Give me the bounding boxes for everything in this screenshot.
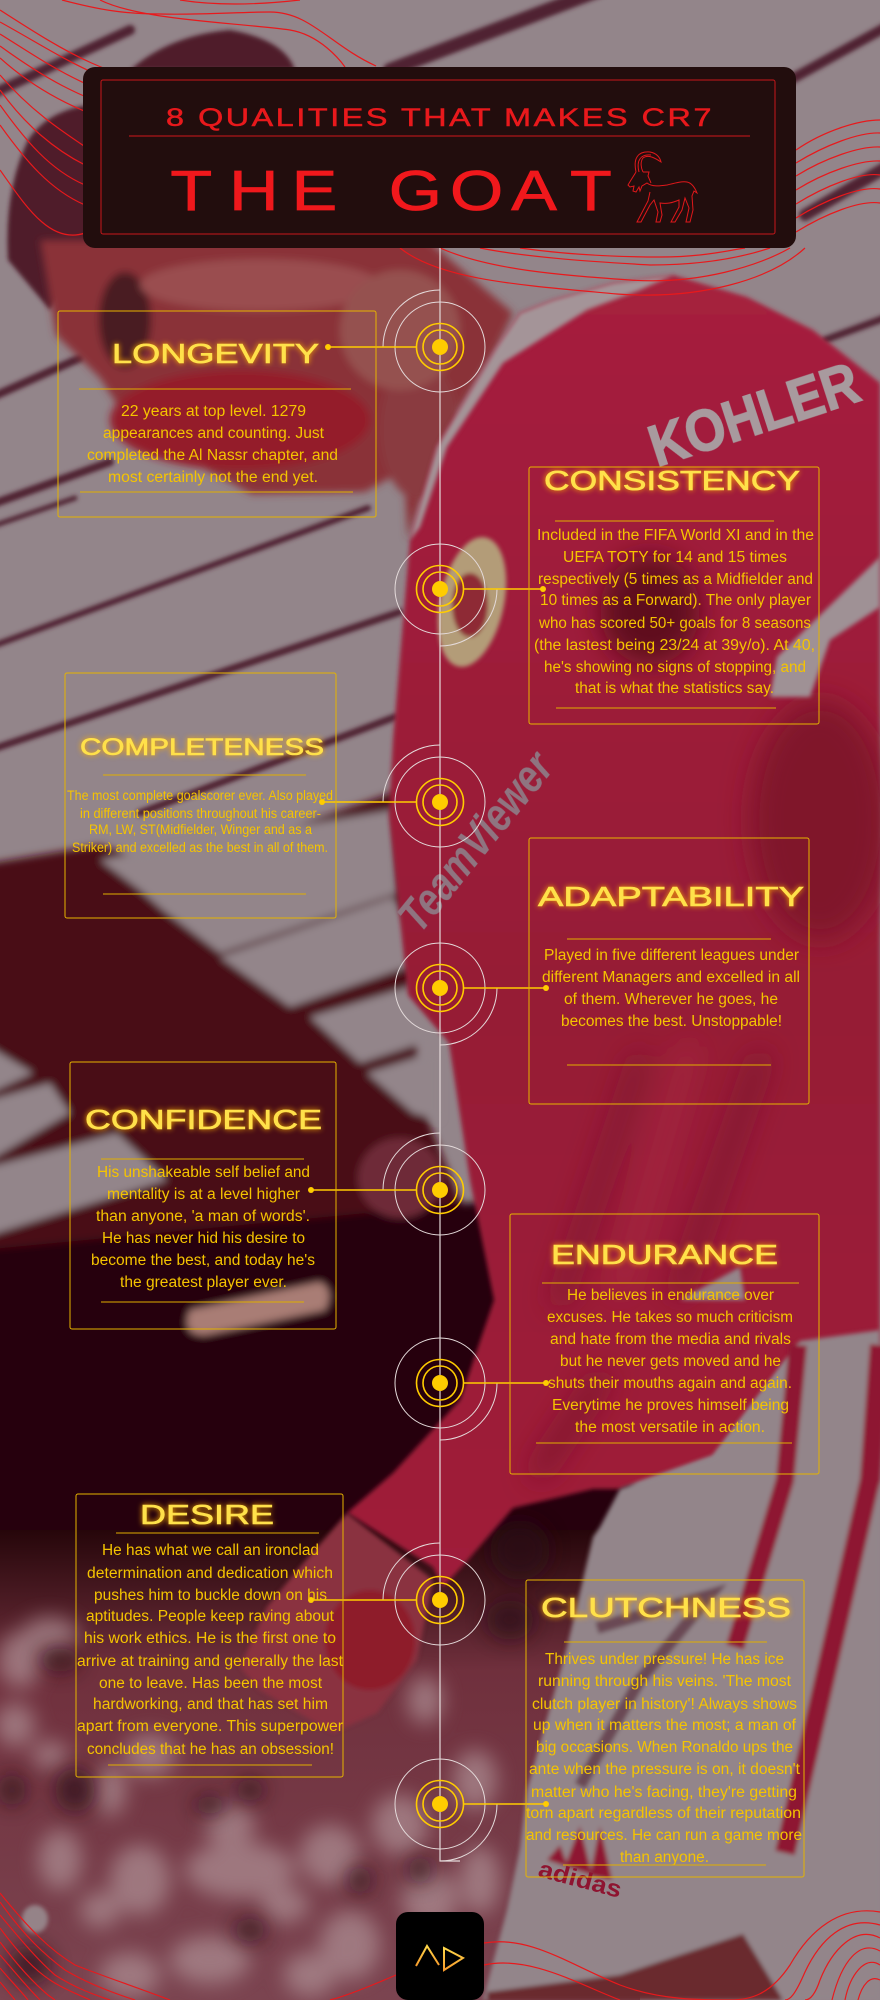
text block: pushes him to buckle down on his bbox=[94, 1587, 327, 1604]
main title: THEGOAT bbox=[170, 159, 612, 223]
text block bbox=[547, 1287, 793, 1436]
text block: his work ethics. He is the first one to bbox=[84, 1630, 336, 1647]
crowd bbox=[0, 1530, 640, 2000]
heading: ADAPTABILITY bbox=[538, 881, 804, 912]
text block: mentality is at a level higher bbox=[107, 1186, 300, 1203]
text block: and resources. He can run a game more bbox=[526, 1827, 802, 1844]
lower left dark area bbox=[0, 788, 636, 1530]
text block bbox=[67, 788, 333, 855]
text block: that is what the statistics say. bbox=[575, 680, 774, 697]
text block: 10 times as a Forward). The only player bbox=[540, 592, 811, 609]
heading: CLUTCHNESS bbox=[541, 1592, 791, 1623]
text block: one to leave. Has been the most bbox=[99, 1675, 323, 1692]
text block bbox=[534, 527, 815, 697]
heading: LONGEVITY bbox=[112, 338, 319, 369]
heading: CONFIDENCE bbox=[85, 1104, 322, 1135]
text block: becomes the best. Unstoppable! bbox=[561, 1013, 782, 1030]
jersey bbox=[347, 275, 880, 1587]
text block: different Managers and excelled in all bbox=[542, 969, 800, 986]
text block: Everytime he proves himself being bbox=[552, 1397, 789, 1414]
heading: COMPLETENESS bbox=[80, 734, 324, 761]
sleeve mesh band bbox=[770, 557, 880, 697]
text block: running through his veins. 'The most bbox=[538, 1673, 792, 1690]
node 1 bbox=[325, 290, 485, 392]
text block: Thrives under pressure! He has ice bbox=[545, 1651, 784, 1668]
heading: CONSISTENCY bbox=[544, 465, 800, 496]
node 3 bbox=[319, 745, 485, 847]
text block: and hate from the media and rivals bbox=[550, 1331, 791, 1348]
heading: DESIRE bbox=[140, 1499, 274, 1530]
text block: clutch player in history'! Always shows bbox=[532, 1696, 797, 1713]
crowd blotches bbox=[0, 1617, 500, 1997]
text block: than anyone, 'a man of words'. bbox=[96, 1208, 310, 1225]
text block: Striker) and excelled as the best in all of them. bbox=[72, 840, 328, 855]
panel: desire bbox=[76, 1494, 344, 1777]
text block: respectively (5 times as a Midfielder and bbox=[538, 571, 813, 588]
text block: big occasions. When Ronaldo ups the bbox=[536, 1739, 793, 1756]
text block: torn apart regardless of their reputation bbox=[526, 1805, 801, 1822]
text block: concludes that he has an obsession! bbox=[87, 1741, 334, 1758]
text block: Played in five different leagues under bbox=[544, 947, 799, 964]
node 2 bbox=[395, 544, 546, 646]
patch under sleeve bbox=[680, 1267, 745, 1300]
text block: UEFA TOTY for 14 and 15 times bbox=[563, 549, 787, 566]
text block: apart from everyone. This superpower bbox=[77, 1718, 343, 1735]
trefoil bars bbox=[547, 1826, 612, 1880]
text block bbox=[87, 403, 338, 486]
text block: The most complete goalscorer ever. Also played bbox=[67, 788, 333, 803]
text block: completed the Al Nassr chapter, and bbox=[87, 447, 338, 464]
panel: adaptability bbox=[529, 838, 809, 1104]
logo badge bbox=[396, 1912, 484, 2000]
text block: He has never hid his desire to bbox=[102, 1230, 305, 1247]
text block: RM, LW, ST(Midfielder, Winger and as a bbox=[89, 822, 312, 837]
node 5 bbox=[308, 1133, 485, 1235]
text block: the greatest player ever. bbox=[120, 1274, 287, 1291]
text block: up when it matters the most; a man of bbox=[533, 1717, 797, 1734]
text block: arrive at training and generally the last bbox=[77, 1653, 344, 1670]
text block: excuses. He takes so much criticism bbox=[547, 1309, 793, 1326]
hair bbox=[7, 30, 295, 310]
hand bbox=[240, 1513, 433, 1733]
text block: (the lastest being 23/24 at 39y/o). At 40, bbox=[534, 637, 815, 654]
wall stripes bbox=[0, 0, 880, 813]
text block: 22 years at top level. 1279 bbox=[121, 403, 306, 420]
collar trim bbox=[410, 275, 673, 540]
text block: He has what we call an ironclad bbox=[102, 1542, 319, 1559]
panel: confidence bbox=[70, 1062, 336, 1329]
text block: determination and dedication which bbox=[87, 1565, 333, 1582]
text block: His unshakeable self belief and bbox=[97, 1164, 310, 1181]
text block: become the best, and today he's bbox=[91, 1252, 315, 1269]
node 6 bbox=[395, 1338, 549, 1440]
text block: most certainly not the end yet. bbox=[108, 469, 318, 486]
text block: in different positions throughout his career- bbox=[80, 806, 321, 821]
text block: He believes in endurance over bbox=[567, 1287, 774, 1304]
text block: who has scored 50+ goals for 8 seasons bbox=[538, 615, 811, 632]
node 7 bbox=[308, 1543, 485, 1645]
panel: completeness bbox=[65, 673, 336, 918]
node 8 bbox=[395, 1759, 549, 1861]
background photo: TeamViewer bbox=[387, 740, 564, 941]
crest bbox=[434, 534, 510, 670]
icon: goat bbox=[628, 152, 697, 222]
text block: but he never gets moved and he bbox=[560, 1353, 781, 1370]
face and neck bbox=[40, 240, 513, 540]
text block bbox=[542, 947, 800, 1030]
text block: the most versatile in action. bbox=[575, 1419, 765, 1436]
text block: Included in the FIFA World XI and in the bbox=[537, 527, 814, 544]
shirt number bbox=[580, 1595, 710, 1786]
text block bbox=[91, 1164, 315, 1291]
subtitle: 8 QUALITIES THAT MAKES CR7 bbox=[166, 104, 714, 132]
text block: than anyone. bbox=[620, 1849, 709, 1866]
text block: appearances and counting. Just bbox=[103, 425, 325, 442]
text block bbox=[77, 1542, 344, 1758]
heading: ENDURANCE bbox=[551, 1239, 778, 1270]
text block: shuts their mouths again and again. bbox=[548, 1375, 792, 1392]
text block: hardworking, and that has set him bbox=[93, 1696, 328, 1713]
text block: he's showing no signs of stopping, and bbox=[544, 659, 806, 676]
timeline vertical line bbox=[440, 248, 460, 1861]
panel: consistency bbox=[529, 465, 819, 724]
panel: longevity bbox=[58, 311, 376, 517]
shorts bbox=[483, 1330, 880, 2000]
node 4 bbox=[395, 943, 549, 1045]
text block: of them. Wherever he goes, he bbox=[564, 991, 778, 1008]
text block: matter who he's facing, they're getting bbox=[531, 1784, 797, 1801]
text block: aptitudes. People keep raving about bbox=[86, 1608, 335, 1625]
title banner bbox=[83, 67, 796, 248]
panel: endurance bbox=[510, 1214, 819, 1474]
text block bbox=[526, 1651, 802, 1866]
background photo: adidas bbox=[535, 1856, 625, 1904]
text block: ante when the pressure is on, it doesn't bbox=[529, 1761, 801, 1778]
panel: clutchness bbox=[526, 1580, 804, 1877]
jersey folds bbox=[540, 555, 880, 1470]
shorts stripes bbox=[735, 1345, 798, 1647]
